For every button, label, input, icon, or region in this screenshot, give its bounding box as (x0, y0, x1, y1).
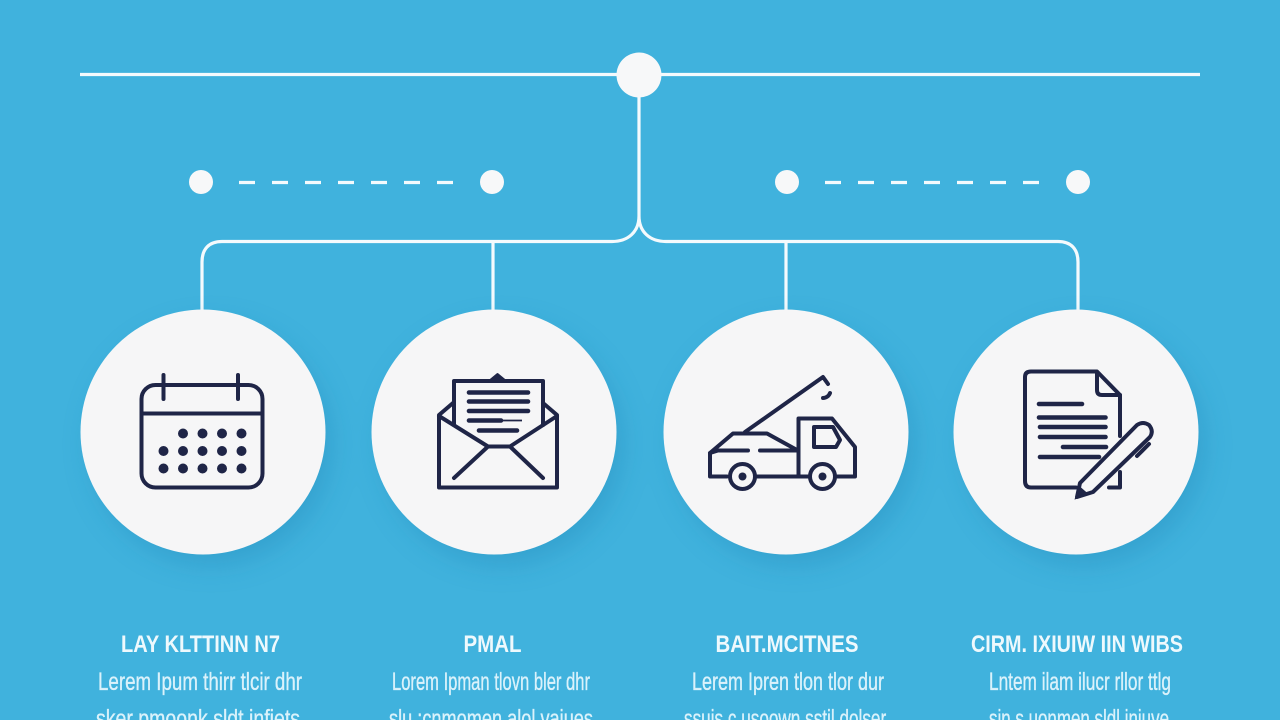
icon: document and pen (1025, 372, 1152, 498)
panel: document (954, 310, 1198, 554)
text block: column 4: CIRM. IXIUIW IIN WIBS (971, 631, 1183, 658)
top timeline line (80, 73, 1200, 76)
text block: column 1 (96, 631, 302, 720)
text block: column 1: LAY KLTTINN N7 (121, 631, 280, 658)
text block: column 2: PMAL (464, 631, 522, 658)
dashed connector right (775, 170, 1090, 194)
text block: column 2 (389, 631, 593, 720)
dashed connector left (189, 170, 504, 194)
panel: truck (664, 310, 908, 554)
connector tree (202, 80, 1078, 310)
text block: column 3 (684, 631, 890, 720)
icon: open envelope (439, 374, 557, 488)
icon: calendar (142, 375, 262, 488)
text block: column 2: Lorem Ipman tlovn bler dhr (392, 668, 590, 696)
icon: tow truck (710, 377, 855, 489)
circle shadows (91, 324, 1204, 564)
text block: column 3: Lerem Ipren tlon tlor dur (692, 668, 884, 696)
text block: column 3: BAIT.MCITNES (716, 631, 858, 658)
text block: column 1: Lerem Ipum thirr tlcir dhr (98, 668, 302, 696)
panel: mail (372, 310, 616, 554)
panel: calendar (80, 310, 326, 554)
top centre node (616, 52, 662, 98)
text block: column 4: Lntem ilam ilucr rllor ttlg (989, 668, 1171, 696)
text block: column 4 (971, 631, 1183, 720)
